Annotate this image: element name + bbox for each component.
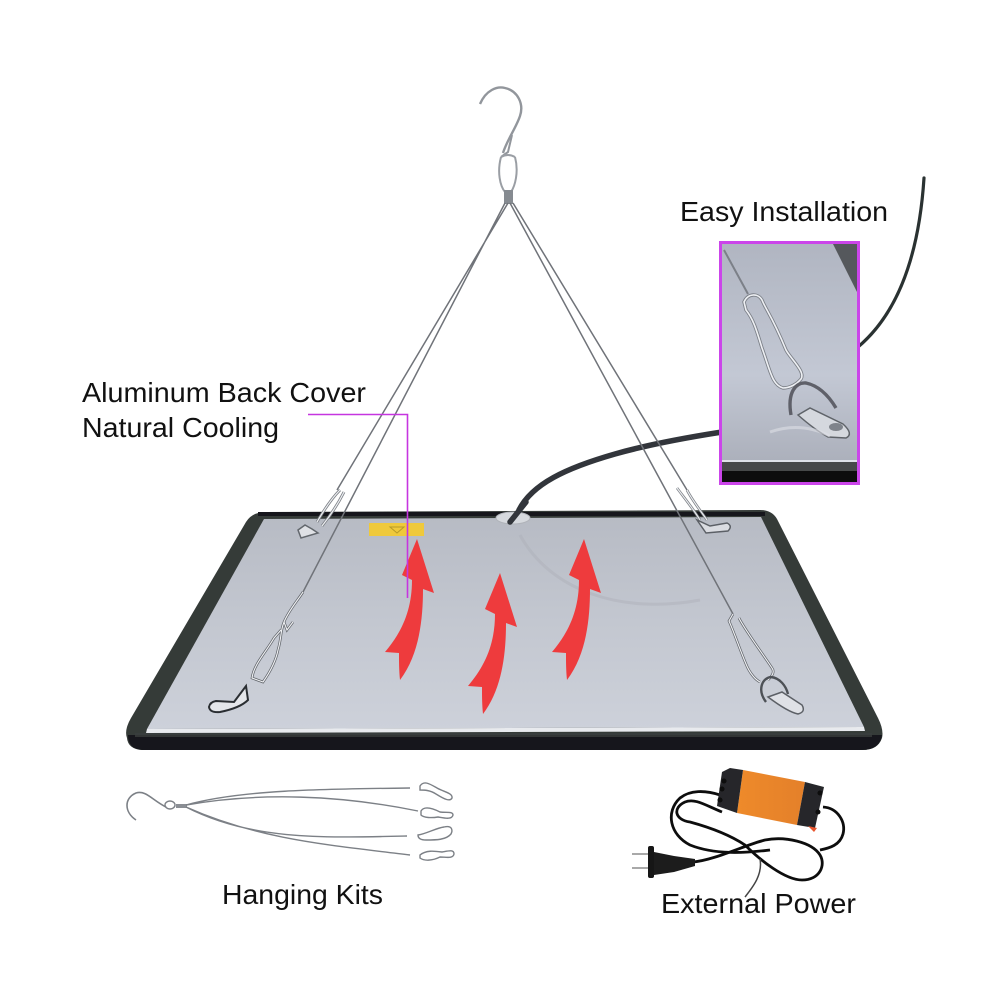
- clip 1: [420, 783, 452, 800]
- heat arrows: [385, 539, 601, 714]
- heading: easy installation: Easy Installation: [680, 196, 888, 227]
- kit wires: [186, 788, 418, 855]
- external power adapter: [632, 768, 844, 897]
- top right hanger: [677, 488, 730, 533]
- callout leader: [308, 414, 408, 598]
- warning label: [369, 523, 424, 536]
- hanging kits illustration: [127, 783, 454, 860]
- callout: aluminum back cover: Natural Cooling: [82, 412, 279, 443]
- arrow 2: [468, 573, 517, 714]
- bottom right hanger: [729, 614, 803, 714]
- panel surface: [147, 517, 864, 729]
- power cables: [671, 792, 844, 897]
- bottom left hanger: [209, 592, 303, 712]
- infographic: hanging panel light back view: [82, 86, 926, 914]
- callout: aluminum back cover: [82, 377, 408, 598]
- clip 2: [421, 808, 453, 818]
- arrow 1: [385, 539, 434, 680]
- power cable behind the panel: [519, 178, 924, 510]
- clip 3: [418, 827, 452, 840]
- panel frame: [126, 510, 883, 750]
- label: external power: External Power: [661, 888, 856, 919]
- arrow 3: [552, 539, 601, 680]
- top left hanger: [298, 490, 344, 538]
- hanging wires and top hook: [303, 88, 733, 614]
- clip 4: [420, 851, 454, 860]
- panel: aluminum back cover with frame: [126, 502, 883, 750]
- wires: [303, 203, 733, 614]
- hook: [480, 88, 521, 153]
- adapter body: [717, 768, 824, 832]
- cable grommet: [496, 512, 530, 524]
- callout text: Aluminum Back Cover: [82, 377, 366, 408]
- plug: [632, 846, 695, 878]
- clips and hangers on panel: [209, 488, 803, 714]
- kit hook: [127, 792, 166, 820]
- inset: hanger detail: [720, 242, 858, 484]
- label: hanging kits: Hanging Kits: [222, 879, 383, 910]
